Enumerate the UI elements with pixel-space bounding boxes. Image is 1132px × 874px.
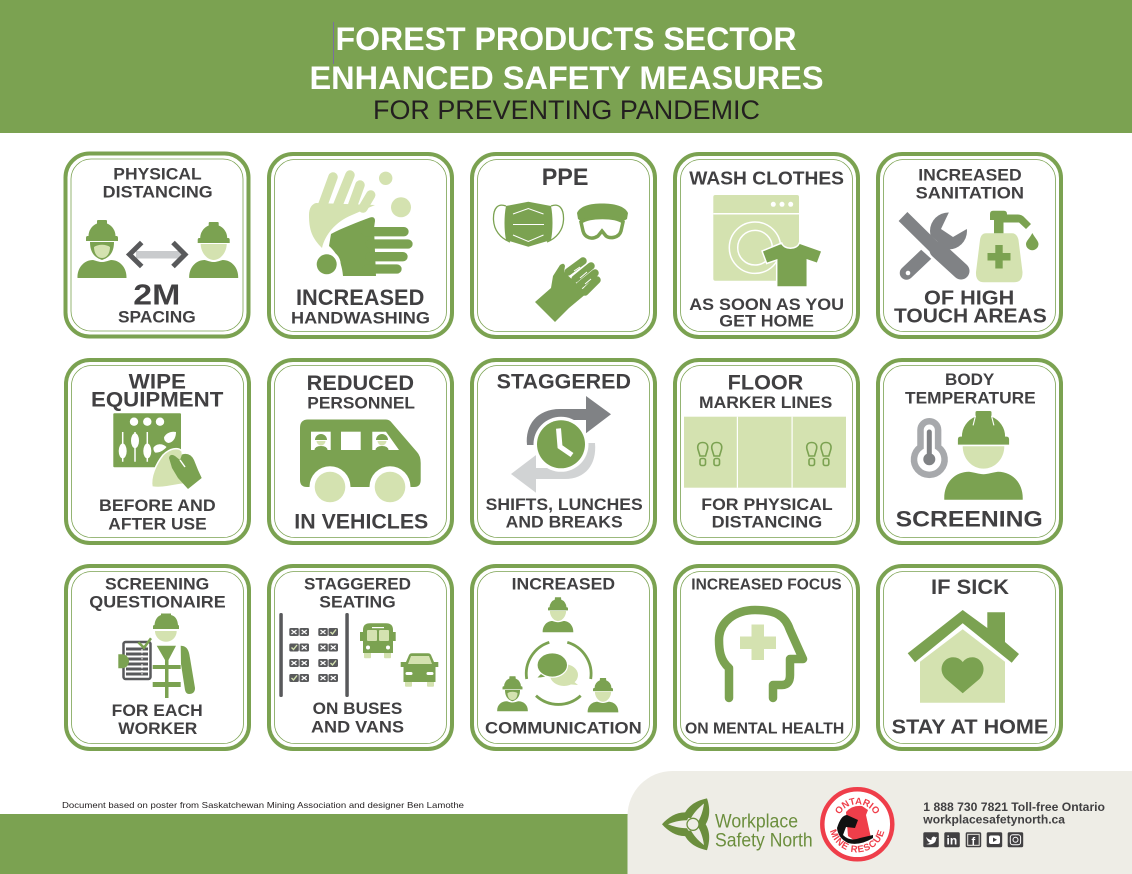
panel: floor marker lines — [675, 360, 858, 543]
contact details — [922, 802, 1105, 827]
heading: reduced personnel: PERSONNEL — [307, 395, 415, 413]
wordmark: Workplace — [715, 812, 798, 833]
footer panel — [628, 771, 1132, 874]
panel: increased communication — [472, 566, 655, 749]
caption: shifts lunches and breaks: AND BREAKS — [506, 514, 623, 532]
panel: staggered seating — [269, 566, 452, 749]
icon: washing hands — [309, 172, 411, 278]
heading: increased handwashing: INCREASED — [296, 285, 424, 310]
heading: staggered: STAGGERED — [497, 370, 631, 393]
logo: Ontario Mine Rescue — [820, 787, 895, 862]
icon: glove — [535, 261, 597, 322]
icon: instagram — [1008, 832, 1023, 847]
icon: twitter — [923, 832, 939, 847]
title line one: FOREST PRODUCTS SECTOR — [336, 21, 796, 57]
caption: for physical distancing: DISTANCING — [712, 513, 822, 532]
panel: if sick stay at home — [878, 566, 1061, 749]
caption: for each worker: WORKER — [118, 719, 197, 738]
subtitle: FOR PREVENTING PANDEMIC — [373, 95, 760, 125]
icon: t-shirt — [762, 243, 822, 287]
title line two: ENHANCED SAFETY MEASURES — [310, 60, 824, 96]
logo: Workplace Safety North — [662, 792, 813, 856]
caption: on mental health: ON MENTAL HEALTH — [685, 720, 844, 737]
panel: physical distancing — [66, 154, 248, 336]
icon: worker — [944, 411, 1023, 500]
caption: on buses and vans: AND VANS — [311, 718, 404, 737]
heading: physical distancing — [103, 164, 213, 202]
contact details: workplacesafetynorth.ca — [922, 815, 1066, 827]
wordmark — [715, 812, 813, 852]
caption: before and after use: BEFORE AND — [99, 496, 216, 515]
icon: facebook: f — [972, 836, 976, 848]
caption: of high touch areas: TOUCH AREAS — [894, 305, 1047, 328]
heading: physical distancing: PHYSICAL — [113, 164, 202, 184]
icon: washing machine — [713, 195, 799, 281]
caption: for physical distancing: FOR PHYSICAL — [701, 495, 833, 514]
heading: increased focus: INCREASED FOCUS — [691, 576, 842, 593]
logo: Ontario Mine Rescue: ONTARIO — [836, 798, 880, 814]
icon: sanitizer bottle — [976, 211, 1038, 282]
icon: worker left — [77, 220, 127, 278]
icon: van — [300, 420, 421, 507]
icon: van — [401, 653, 438, 687]
label: 2M spacing: SPACING — [118, 308, 196, 327]
heading: if sick: IF SICK — [931, 576, 1009, 599]
caption: before and after use: AFTER USE — [108, 514, 207, 533]
label: 2M spacing: 2M — [133, 280, 180, 312]
heading: body temperature: TEMPERATURE — [905, 388, 1036, 407]
heading: increased: INCREASED — [512, 574, 615, 593]
heading: reduced personnel: REDUCED — [307, 372, 414, 395]
contact details: 1 888 730 7821 Toll-free Ontario — [923, 802, 1105, 814]
panel: wash clothes — [675, 154, 858, 337]
caption: stay at home: STAY AT HOME — [892, 716, 1048, 738]
icon: linkedin: in — [946, 834, 957, 848]
icon: seating chart — [279, 613, 349, 697]
panel: increased sanitation — [878, 154, 1061, 337]
panel: increased handwashing — [269, 154, 452, 337]
heading: screening questionaire — [89, 574, 226, 611]
caption: on buses and vans — [311, 699, 404, 737]
icon: floor markers with footprints — [684, 417, 846, 488]
caption: communication: COMMUNICATION — [485, 718, 642, 737]
heading: wash clothes: WASH CLOTHES — [689, 168, 844, 188]
panel: PPE — [472, 154, 655, 337]
panel: reduced personnel — [269, 360, 452, 543]
icon: worker top — [543, 597, 573, 632]
heading: increased sanitation: INCREASED — [918, 166, 1022, 185]
heading: floor marker lines: FLOOR — [728, 371, 803, 394]
icon: control panel — [113, 413, 181, 467]
label: 2M spacing — [118, 280, 196, 327]
social media icons — [923, 832, 1023, 848]
icon: worker with vest — [153, 614, 195, 698]
panel: body temperature — [878, 360, 1061, 543]
heading: increased handwashing: HANDWASHING — [291, 308, 430, 327]
icon: speech bubbles — [537, 653, 578, 686]
heading: floor marker lines — [699, 371, 832, 412]
heading: wipe equipment: EQUIPMENT — [91, 389, 223, 412]
caption: shifts lunches and breaks — [486, 496, 643, 532]
icon: worker right — [588, 678, 618, 712]
heading: increased sanitation — [916, 166, 1024, 202]
heading: body temperature: BODY — [945, 370, 995, 389]
icon: bus — [360, 623, 396, 658]
caption: of high touch areas: OF HIGH — [924, 286, 1014, 309]
arrow: two metres apart — [130, 242, 185, 266]
heading: PPE: PPE — [542, 164, 588, 191]
footer green band — [0, 814, 640, 874]
heading: physical distancing: DISTANCING — [103, 182, 213, 202]
panel: mental health — [675, 566, 858, 749]
heading: increased sanitation: SANITATION — [916, 183, 1024, 202]
heading: increased handwashing — [291, 285, 430, 327]
caption: in vehicles: IN VEHICLES — [294, 510, 428, 533]
header banner — [0, 0, 1132, 133]
caption: for physical distancing — [701, 495, 833, 532]
icon: staggered arrows and clock — [511, 396, 611, 493]
heading: wipe equipment: WIPE — [129, 370, 186, 393]
caption: as soon as you get home: GET HOME — [719, 312, 814, 331]
caption: for each worker — [112, 701, 203, 738]
heading: staggered seating: STAGGERED — [304, 574, 411, 593]
icon: house with heart — [908, 610, 1019, 703]
icon: circular arrows — [526, 642, 591, 704]
icon: worker left — [497, 676, 528, 711]
heading: wipe equipment — [91, 370, 223, 412]
heading: screening questionaire: SCREENING — [105, 574, 209, 593]
panel: screening questionnaire — [66, 566, 249, 749]
icon: thermometer — [914, 421, 945, 475]
icon: clipboard — [118, 638, 151, 679]
heading: screening questionaire: QUESTIONAIRE — [89, 592, 226, 611]
caption: on buses and vans: ON BUSES — [313, 699, 402, 718]
wordmark: Safety North — [715, 831, 813, 852]
heading: body temperature — [905, 370, 1036, 407]
caption: for each worker: FOR EACH — [112, 701, 203, 720]
icon: hand with cloth — [152, 449, 202, 489]
heading: reduced personnel — [307, 372, 415, 413]
heading: staggered seating: SEATING — [319, 592, 396, 611]
caption: as soon as you get home — [689, 295, 844, 331]
icon: wrench and screwdriver — [903, 205, 972, 275]
icon: safety goggles — [577, 204, 628, 238]
caption: before and after use — [99, 496, 216, 533]
icon: trillium — [662, 792, 717, 856]
caption: as soon as you get home: AS SOON AS YOU — [689, 295, 844, 314]
panel: staggered shifts — [472, 360, 655, 543]
icon: face mask — [493, 202, 564, 247]
caption: of high touch areas — [894, 286, 1047, 328]
heading: floor marker lines: MARKER LINES — [699, 394, 832, 412]
caption: screening: SCREENING — [896, 507, 1043, 532]
icon: head with cross — [719, 610, 803, 698]
icon: youtube — [987, 832, 1002, 847]
caption: shifts lunches and breaks: SHIFTS, LUNCHES — [486, 496, 643, 514]
panel: wipe equipment — [66, 360, 249, 543]
icon: worker right — [189, 222, 238, 278]
logo: Ontario Mine Rescue: MINE RESCUE — [830, 829, 884, 852]
heading: staggered seating — [304, 574, 411, 611]
credit text: Document based on poster from Saskatchewan Mining Association and designer Ben Lamothe — [62, 800, 464, 810]
